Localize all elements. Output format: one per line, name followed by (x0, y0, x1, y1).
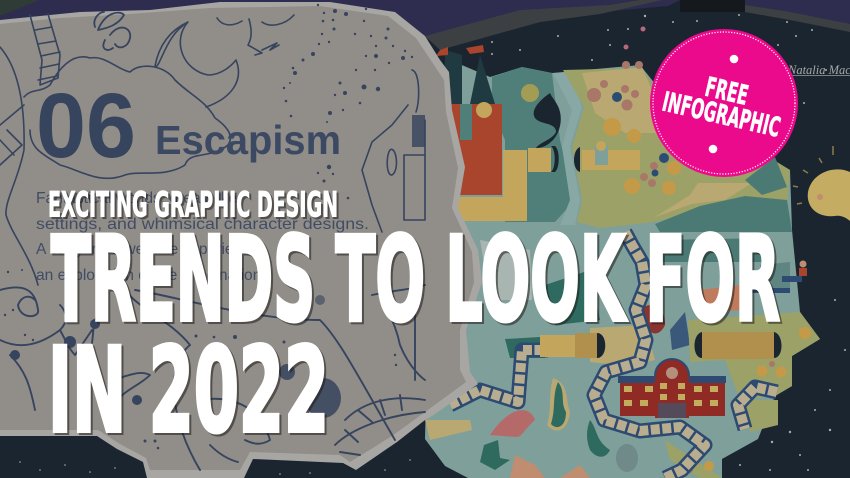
Escapism heading: Escapism (155, 117, 341, 163)
train tracks (450, 232, 777, 478)
doodles on paper (0, 12, 425, 470)
paper body text: an exploration of the imagination. (36, 267, 266, 284)
face (217, 15, 294, 55)
subtitle: EXCITING GRAPHIC DESIGN (48, 186, 338, 226)
badge: free infographic (650, 29, 798, 177)
tan field lower (655, 183, 752, 217)
title line two: IN 2022 (48, 322, 329, 459)
paper dots (4, 4, 413, 449)
teal land top (492, 67, 575, 222)
school building (618, 359, 726, 418)
06 numeral: 06 (36, 75, 136, 177)
paper body text: A story in viewer-like experience (36, 241, 259, 258)
paper body text: settings, and whimsical character designs. (36, 216, 369, 233)
tan field (582, 67, 658, 133)
left vine (0, 47, 38, 285)
cloud (24, 57, 230, 178)
title block (48, 186, 780, 459)
badge: free infographic: FREE (702, 72, 751, 112)
teal land right (655, 196, 792, 232)
paper body text (36, 190, 369, 284)
sea creatures (480, 378, 638, 478)
tunnels and trains lower (540, 332, 782, 359)
olive field (563, 68, 790, 228)
crescent moon (155, 22, 238, 107)
castle (436, 45, 640, 221)
flowers (521, 61, 681, 195)
right balcony figure (745, 260, 807, 293)
map land (425, 60, 820, 478)
ladder top (30, 14, 60, 85)
river (553, 73, 582, 225)
castle doodle (362, 70, 425, 232)
lower doodles (0, 285, 425, 470)
blobs (10, 115, 425, 418)
paper panel: torn sketch page (0, 2, 482, 478)
tan lagoon and cars (425, 312, 820, 478)
flower (94, 12, 130, 50)
paper body text: Fantastical worlds, dreamlike (36, 190, 237, 207)
dark pond (534, 93, 561, 148)
mid-map details behind the title (480, 238, 790, 358)
moon sun (793, 146, 850, 221)
